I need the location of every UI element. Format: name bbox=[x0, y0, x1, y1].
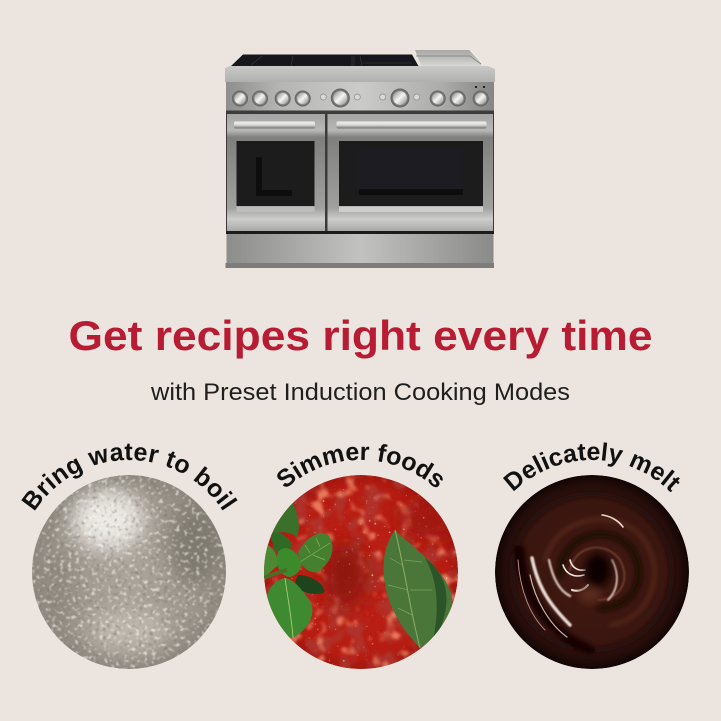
cooktop bbox=[230, 54, 419, 67]
range illustration bbox=[225, 50, 495, 268]
griddle bbox=[415, 50, 482, 68]
control knobs bbox=[232, 86, 489, 108]
mode: simmer foods bbox=[264, 444, 458, 669]
photo: boiling water in pan bbox=[32, 475, 226, 669]
photo: melted chocolate swirl bbox=[495, 475, 689, 669]
subtitle: with Preset Induction Cooking Modes bbox=[150, 379, 570, 406]
curved label: bring water to boil: Bring water to boil bbox=[21, 444, 238, 510]
infographic canvas bbox=[21, 50, 689, 669]
mode: delicately melt bbox=[495, 442, 689, 669]
right oven door bbox=[328, 114, 493, 231]
basil leaf large bbox=[383, 530, 452, 648]
countertop edge bbox=[225, 66, 495, 82]
storage drawer bbox=[226, 231, 494, 268]
curved label: simmer foods: Simmer foods bbox=[277, 444, 443, 488]
control panel bbox=[226, 82, 494, 111]
frame behind doors bbox=[226, 112, 494, 234]
title: Get recipes right every time bbox=[68, 312, 652, 359]
left oven door bbox=[227, 114, 325, 231]
curved label: delicately melt: Delicately melt bbox=[503, 442, 680, 492]
mode: bring water to boil bbox=[21, 444, 238, 669]
basil sprig bbox=[264, 503, 333, 638]
photo: tomato sauce with basil bbox=[264, 475, 462, 669]
